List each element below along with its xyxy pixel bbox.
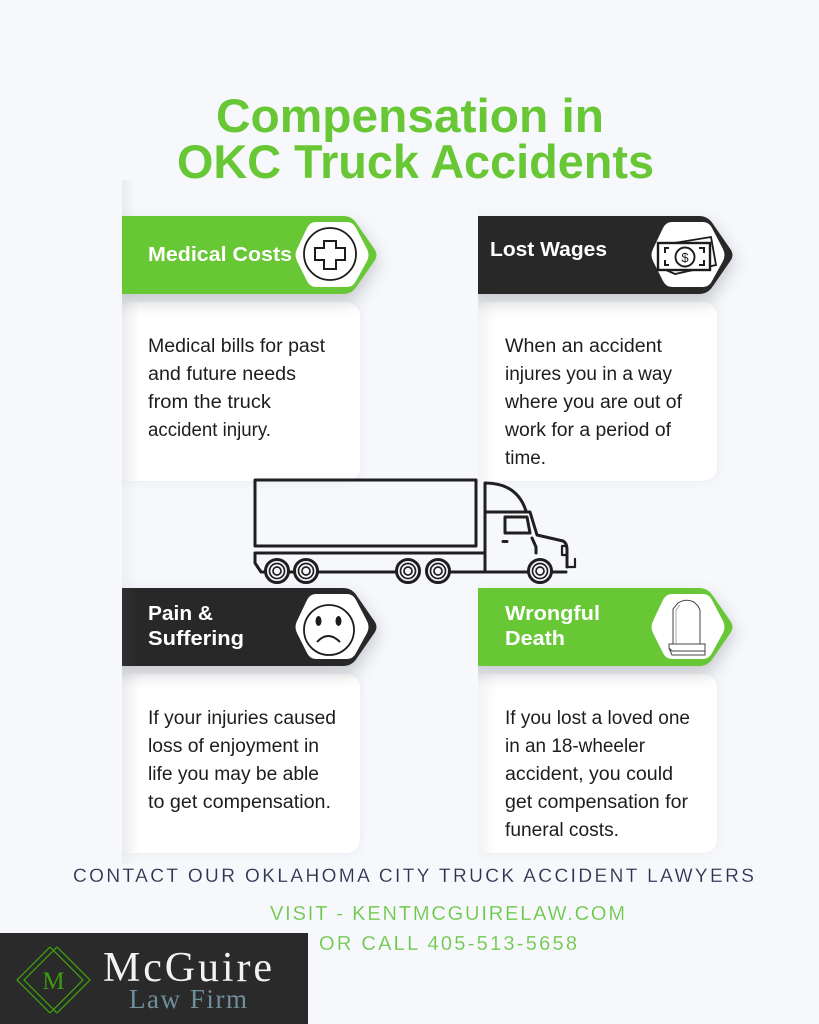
- text: wrongful death: [505, 708, 690, 841]
- header bar: pain and suffering: [122, 588, 376, 666]
- text: pain and suffering: loss of enjoyment in: [148, 736, 319, 757]
- logo name: McGuire: [103, 945, 272, 991]
- heading: pain and suffering: Suffering: [148, 628, 244, 650]
- cab: [485, 483, 567, 572]
- text: lost wages: where you are out of: [504, 392, 683, 413]
- text: lost wages: [504, 336, 683, 469]
- heading: lost wages: Lost Wages: [490, 239, 607, 261]
- panel: medical costs: [112, 216, 379, 481]
- chassis: [255, 553, 566, 572]
- logo mark: [17, 947, 90, 1013]
- heading: wrongful death: [505, 603, 600, 650]
- icon: truck: [255, 480, 575, 582]
- logo: [0, 933, 308, 1024]
- heading: medical costs: Medical Costs: [148, 244, 292, 266]
- text: lost wages: injures you in a way: [505, 364, 672, 385]
- cab window: [505, 517, 530, 533]
- icon: gravestone: [652, 594, 724, 659]
- heading: wrongful death: Wrongful: [505, 603, 600, 625]
- icon: medical cross: [296, 222, 368, 287]
- text: medical costs: [148, 336, 326, 441]
- contact website: VISIT - KENTMCGUIRELAW.COM: [270, 903, 625, 925]
- panel: lost wages: [468, 216, 735, 481]
- text: medical costs: accident injury.: [148, 420, 271, 441]
- text: pain and suffering: to get compensation.: [148, 792, 331, 813]
- text: lost wages: time.: [505, 448, 546, 469]
- text: pain and suffering: life you may be able: [148, 764, 319, 785]
- text: pain and suffering: If your injuries caused: [148, 708, 336, 729]
- logo subtitle: Law Firm: [129, 984, 247, 1014]
- contact heading: CONTACT OUR OKLAHOMA CITY TRUCK ACCIDENT LAWYERS: [73, 866, 754, 887]
- icon: banknotes: $: [681, 250, 689, 265]
- text: medical costs: Medical bills for past: [148, 336, 326, 357]
- trailer box: [255, 480, 476, 546]
- wheels: [266, 560, 552, 582]
- text: pain and suffering: [148, 708, 336, 813]
- text: medical costs: and future needs: [148, 364, 296, 385]
- heading: pain and suffering: [148, 603, 244, 650]
- text: lost wages: work for a period of: [504, 420, 672, 441]
- header bar: lost wages: [478, 216, 732, 294]
- icon: sad face: [296, 594, 368, 659]
- text: medical costs: from the truck: [148, 392, 272, 413]
- panel: pain and suffering: [112, 588, 379, 853]
- title: Compensation in: [216, 89, 604, 142]
- column edge shading: [122, 180, 138, 864]
- text: wrongful death: If you lost a loved one: [505, 708, 690, 729]
- icon: banknotes: [652, 222, 724, 287]
- logo mark: M: [42, 968, 65, 995]
- header bar: wrongful death: [478, 588, 732, 666]
- panel: wrongful death: [468, 588, 735, 853]
- heading: pain and suffering: Pain &: [148, 603, 213, 625]
- text: wrongful death: accident, you could: [505, 764, 673, 785]
- text: lost wages: When an accident: [505, 336, 663, 357]
- text: wrongful death: funeral costs.: [505, 820, 619, 841]
- title: [177, 89, 654, 188]
- contact phone: OR CALL 405-513-5658: [319, 933, 577, 955]
- title: OKC Truck Accidents: [177, 135, 654, 188]
- text: wrongful death: get compensation for: [505, 792, 689, 813]
- text: wrongful death: in an 18-wheeler: [505, 736, 646, 757]
- heading: wrongful death: Death: [505, 628, 565, 650]
- header bar: medical costs: [122, 216, 376, 294]
